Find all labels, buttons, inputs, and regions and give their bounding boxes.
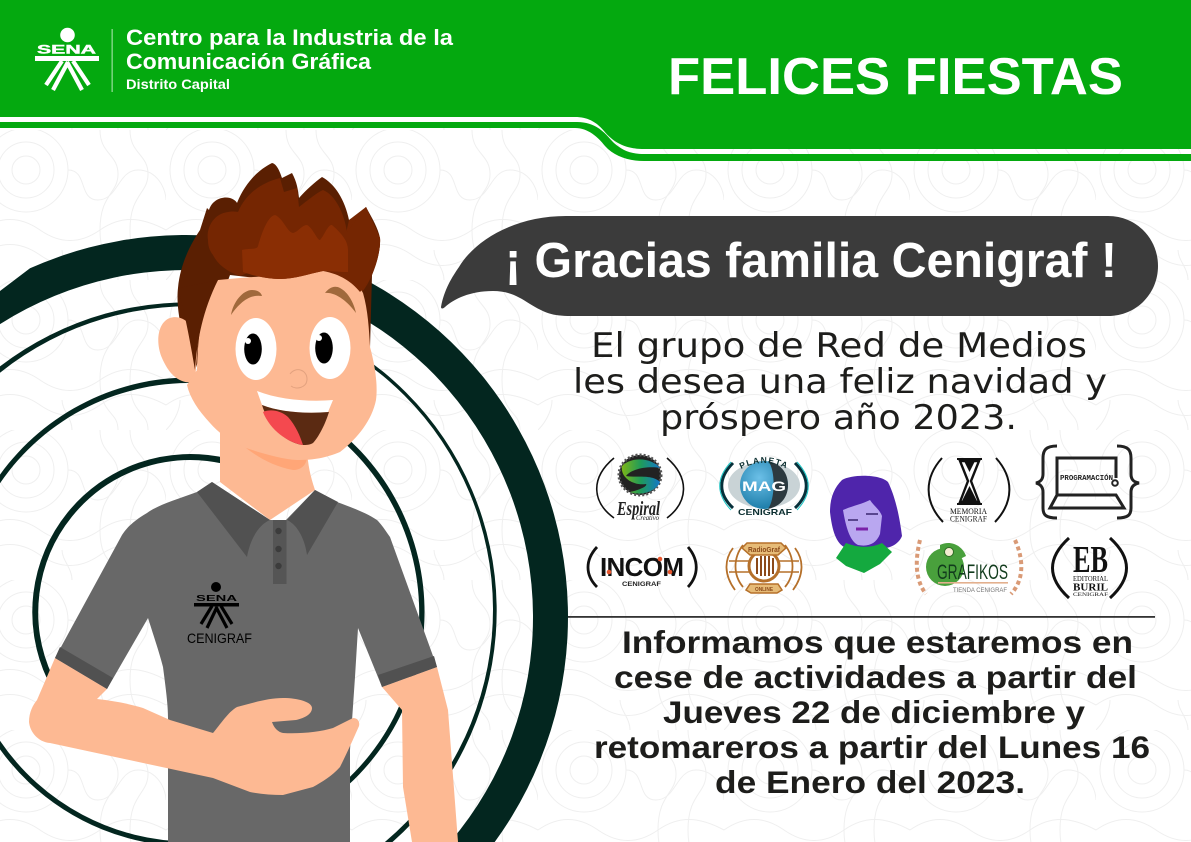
- logo: Memoria Cenigraf: CENIGRAF: [950, 514, 987, 524]
- logo: RadioGraf: RadioGraf: [748, 547, 781, 554]
- logo: Grafikos: [917, 540, 1021, 594]
- speech bubble: [441, 216, 1158, 316]
- SENA logo: [35, 28, 99, 90]
- neck: [220, 430, 315, 520]
- sleeve cuffs: [55, 647, 437, 689]
- bubble heading: ¡ Gracias familia Cenigraf !: [505, 234, 1117, 288]
- ear: [158, 317, 198, 382]
- logo: Incom: INCOM: [600, 552, 684, 582]
- logo: Grafikos: TIENDA CENIGRAF: [953, 588, 1007, 594]
- logo: Espiral Creativo: Espiral: [616, 498, 660, 520]
- logo divider: [112, 29, 113, 92]
- organisation name: [126, 25, 454, 92]
- SENA logo: SENA: [37, 44, 96, 56]
- neck shadow: [240, 443, 307, 470]
- shirt logo: [187, 582, 252, 646]
- logo: Planeta Mag: MAG: [742, 478, 786, 494]
- logo: Editorial Buril: BURIL: [1073, 582, 1108, 594]
- concentric rings: [0, 235, 568, 842]
- logo: purple-haired girl: [830, 476, 902, 573]
- hair front: [178, 178, 380, 370]
- logo: Planeta Mag: [719, 457, 809, 517]
- character: man in polo: [29, 163, 458, 842]
- greeting text: [573, 326, 1107, 437]
- left arm and hand: [29, 658, 359, 795]
- logo: RadioGraf: [726, 543, 802, 593]
- logo: Editorial Buril: [1052, 538, 1126, 598]
- logo: Memoria Cenigraf: [929, 458, 1009, 524]
- nose: [290, 370, 307, 388]
- greeting text: les desea una feliz navidad y: [573, 362, 1107, 401]
- logo: Espiral Creativo: [597, 455, 684, 522]
- organisation name: Centro para la Industria de la: [126, 25, 454, 50]
- logo: Editorial Buril: EDITORIAL: [1073, 574, 1108, 583]
- divider: [568, 616, 1155, 618]
- face: [187, 268, 377, 460]
- polo shirt: [55, 482, 437, 842]
- collar: [197, 482, 338, 557]
- logo: Programacion: PROGRAMACIÓN: [1060, 473, 1113, 483]
- mouth: [257, 391, 333, 445]
- logo: Espiral Creativo: Creativo: [636, 514, 659, 522]
- logo: RadioGraf: ONLINE: [755, 587, 774, 593]
- header band: [0, 0, 1191, 161]
- organisation name: Distrito Capital: [126, 77, 230, 92]
- logo: Memoria Cenigraf: MEMORIA: [950, 506, 988, 516]
- header title: FELICES FIESTAS: [668, 48, 1123, 106]
- greeting text: próspero año 2023.: [660, 398, 1017, 437]
- closing notice: [594, 624, 1150, 800]
- closing notice: retomareros a partir del Lunes 16: [594, 729, 1150, 765]
- greeting text: El grupo de Red de Medios: [591, 326, 1087, 365]
- logo: Planeta Mag: PLANETA: [739, 457, 786, 469]
- closing notice: de Enero del 2023.: [715, 764, 1025, 800]
- closing notice: Jueves 22 de diciembre y: [663, 694, 1086, 730]
- eyes: [236, 317, 350, 380]
- logo: Grafikos: GRAFIKOS: [937, 561, 1008, 584]
- shirt logo: CENIGRAF: [187, 630, 252, 646]
- closing notice: Informamos que estaremos en: [622, 624, 1133, 660]
- logo: Planeta Mag: CENIGRAF: [738, 507, 792, 517]
- shirt logo: SENA: [196, 593, 237, 603]
- logo: Editorial Buril: EB: [1073, 539, 1108, 581]
- logo: Programacion: [1036, 446, 1139, 518]
- right arm: [382, 667, 458, 842]
- organisation name: Comunicación Gráfica: [126, 49, 372, 74]
- logo: Incom: CENIGRAF: [622, 582, 661, 588]
- logo: Incom: [588, 547, 696, 588]
- hair back: [178, 163, 380, 370]
- eyebrows: [231, 287, 356, 315]
- logo: Editorial Buril: CENIGRAF: [1073, 593, 1108, 598]
- placket with buttons: [273, 520, 286, 584]
- closing notice: cese de actividades a partir del: [614, 659, 1137, 695]
